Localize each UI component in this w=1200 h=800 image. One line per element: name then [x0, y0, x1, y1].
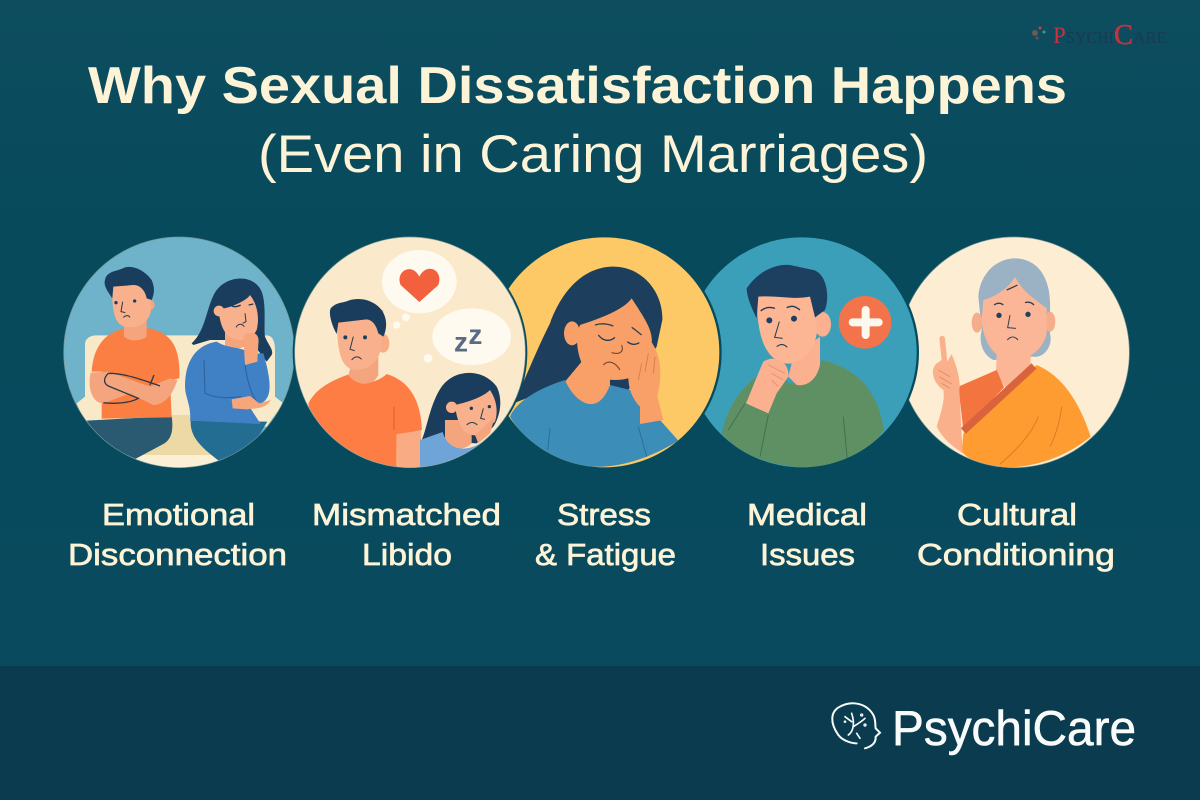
label: stress and fatigue: & Fatigue: [535, 537, 676, 572]
label: mismatched libido: [312, 497, 501, 572]
title: Why Sexual Dissatisfaction Happens: [88, 57, 1067, 115]
label: cultural conditioning: Cultural: [957, 497, 1077, 532]
icon: head with tree: [832, 703, 880, 748]
label: stress and fatigue: [535, 497, 676, 572]
label: emotional disconnection: Emotional: [102, 497, 255, 532]
panel: emotional disconnection illustration: [60, 233, 300, 473]
panel: medical issues illustration: [704, 237, 919, 468]
panel: stress and fatigue illustration: [508, 237, 722, 468]
label: medical issues: [747, 497, 867, 572]
title: [88, 57, 1067, 184]
label: emotional disconnection: [68, 497, 287, 572]
watermark logo top right: SYCHI: [1066, 28, 1114, 47]
labels: [68, 497, 1115, 572]
watermark logo top right: C: [1114, 20, 1133, 51]
panel: cultural conditioning illustration: [908, 236, 1130, 468]
footer band: [0, 666, 1200, 800]
label: mismatched libido: Mismatched: [312, 497, 501, 532]
wordmark: PsychiCare: [892, 702, 1136, 756]
panel: mismatched libido illustration: [290, 233, 530, 473]
cloud: sleep thought: z: [468, 319, 482, 350]
label: stress and fatigue: Stress: [557, 497, 651, 532]
cloud: sleep thought: [424, 308, 511, 365]
watermark logo top right: [1032, 20, 1167, 51]
footer logo: [832, 702, 1136, 756]
watermark logo top right: P: [1053, 23, 1066, 48]
title: (Even in Caring Marriages): [258, 125, 928, 184]
label: medical issues: Medical: [747, 497, 867, 532]
label: cultural conditioning: Conditioning: [917, 537, 1115, 572]
watermark logo top right: ARE: [1133, 28, 1167, 47]
cloud: sleep thought: z: [454, 326, 468, 357]
label: emotional disconnection: Disconnection: [68, 537, 287, 572]
label: mismatched libido: Libido: [362, 537, 452, 572]
cloud: heart thought: [382, 250, 457, 329]
label: cultural conditioning: [917, 497, 1115, 572]
label: medical issues: Issues: [760, 537, 855, 572]
